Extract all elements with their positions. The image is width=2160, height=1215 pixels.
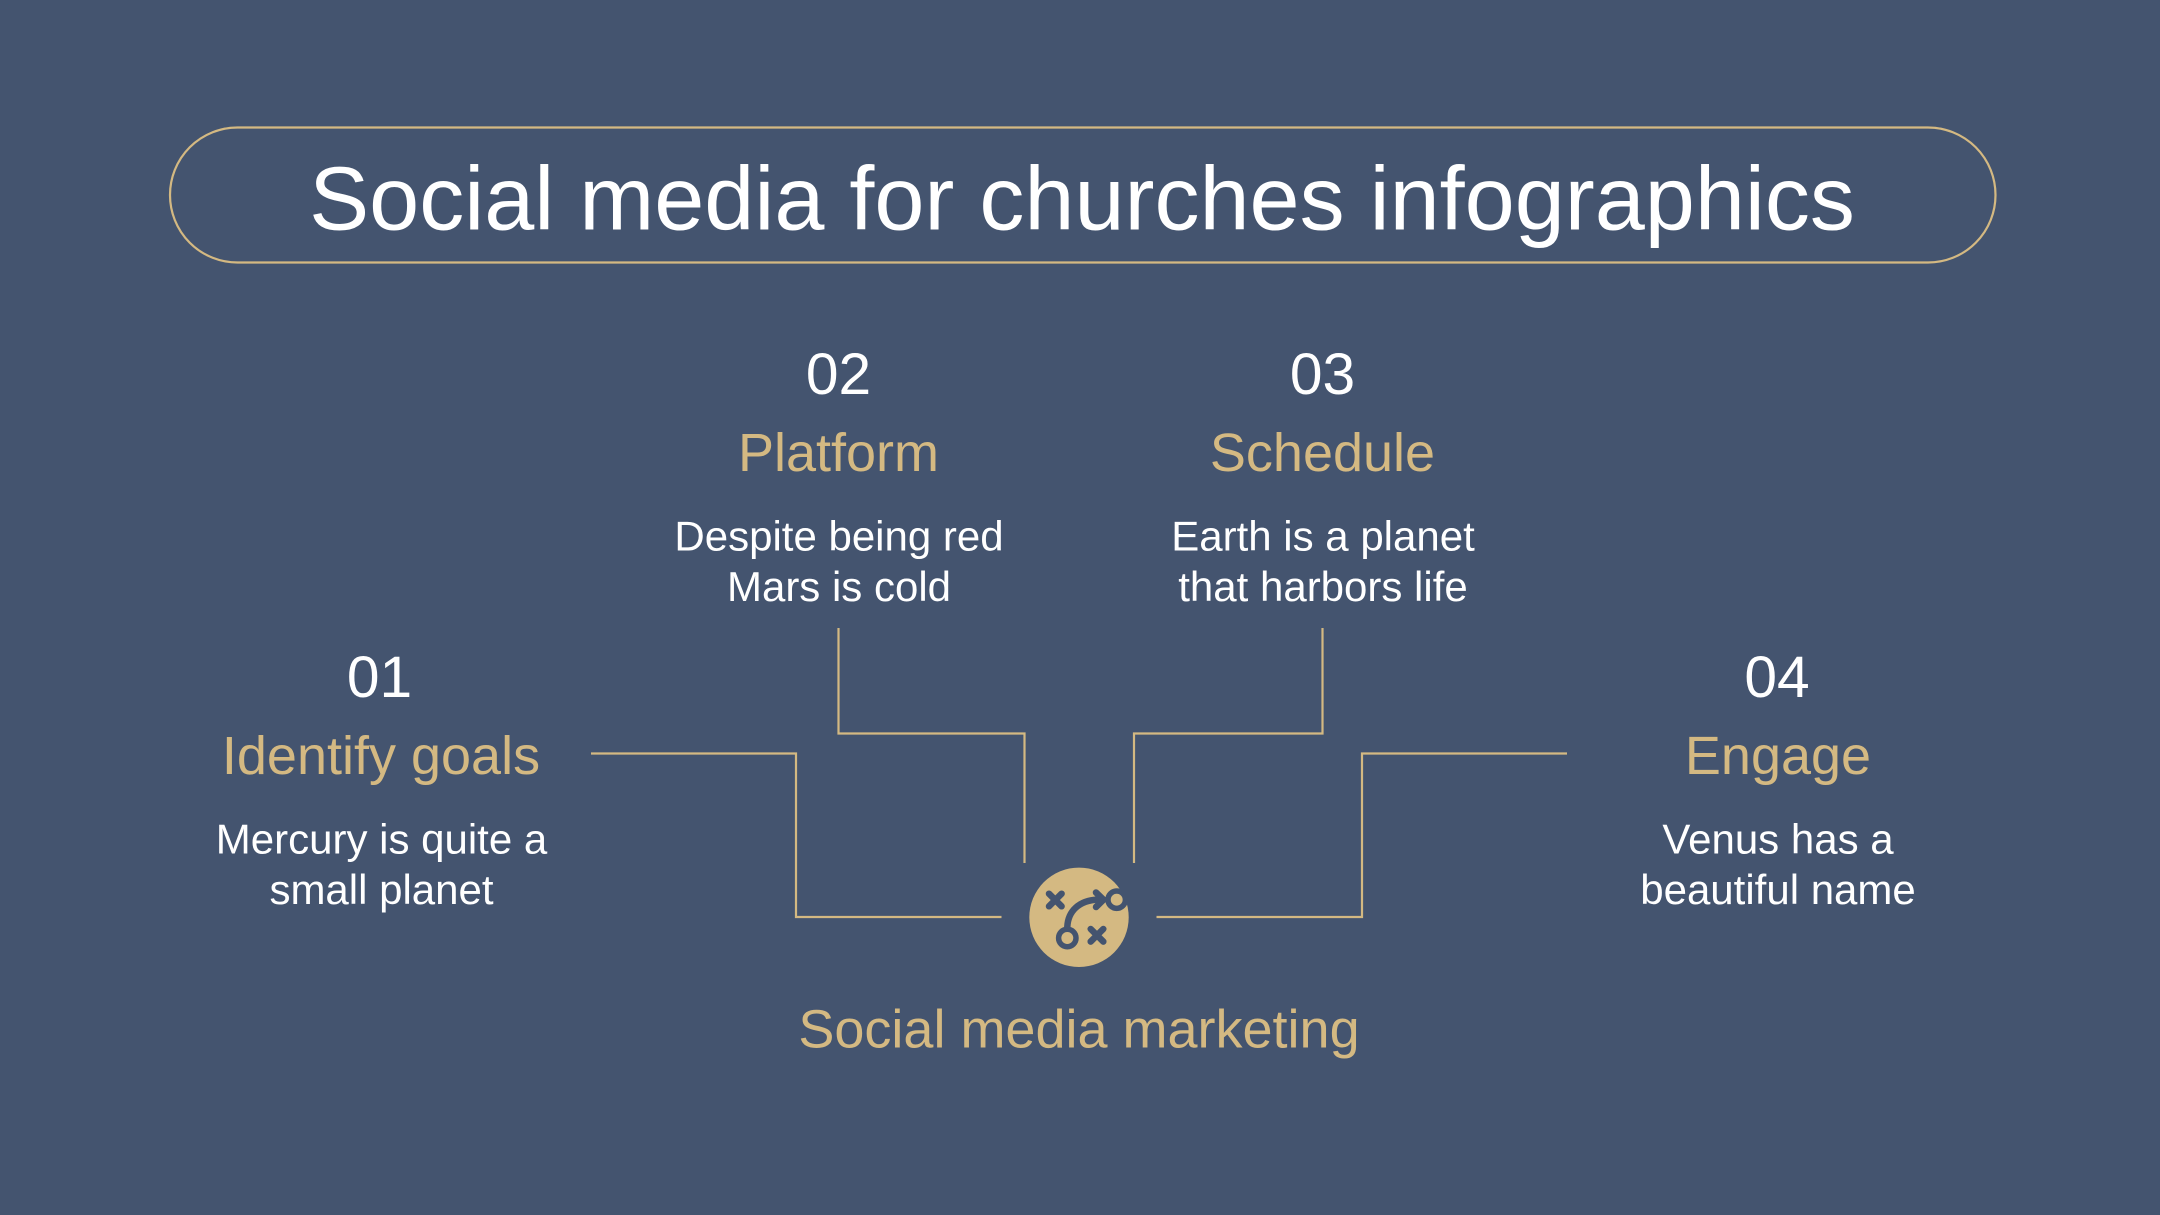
step 01: identify goals: Identify goals — [222, 726, 540, 786]
title pill — [170, 128, 1996, 262]
step 04: engage: Engage — [1685, 726, 1871, 786]
center label: Social media marketing — [798, 1000, 1360, 1060]
connector: step 02 to center — [838, 628, 1024, 863]
step 01: identify goals: small planet — [269, 866, 494, 913]
title: Social media for churches infographics — [309, 150, 1855, 250]
step 02: platform: Despite being red — [674, 512, 1004, 560]
step 04: engage: beautiful name — [1640, 866, 1916, 913]
step 03: schedule: 03 — [1290, 342, 1355, 407]
step 01: identify goals: Mercury is quite a — [216, 816, 548, 862]
step 03: schedule: Earth is a planet — [1171, 512, 1475, 560]
step 02: platform: Platform — [738, 423, 939, 483]
step 02: platform — [674, 342, 1004, 610]
connector: step 01 to center — [591, 754, 1002, 917]
connector: step 04 to center — [1156, 754, 1567, 917]
step 03: schedule: that harbors life — [1178, 563, 1468, 610]
step 02: platform: Mars is cold — [727, 563, 951, 610]
step 02: platform: 02 — [806, 342, 871, 407]
step 03: schedule — [1171, 342, 1475, 610]
step 04: engage: 04 — [1744, 645, 1810, 710]
step 01: identify goals: 01 — [347, 645, 412, 710]
step 01: identify goals — [216, 645, 548, 913]
connector: step 03 to center — [1134, 628, 1322, 863]
step 04: engage: Venus has a — [1662, 816, 1894, 862]
step 04: engage — [1640, 645, 1916, 913]
step 03: schedule: Schedule — [1210, 423, 1435, 483]
icon: strategy play diagram — [1029, 868, 1129, 967]
